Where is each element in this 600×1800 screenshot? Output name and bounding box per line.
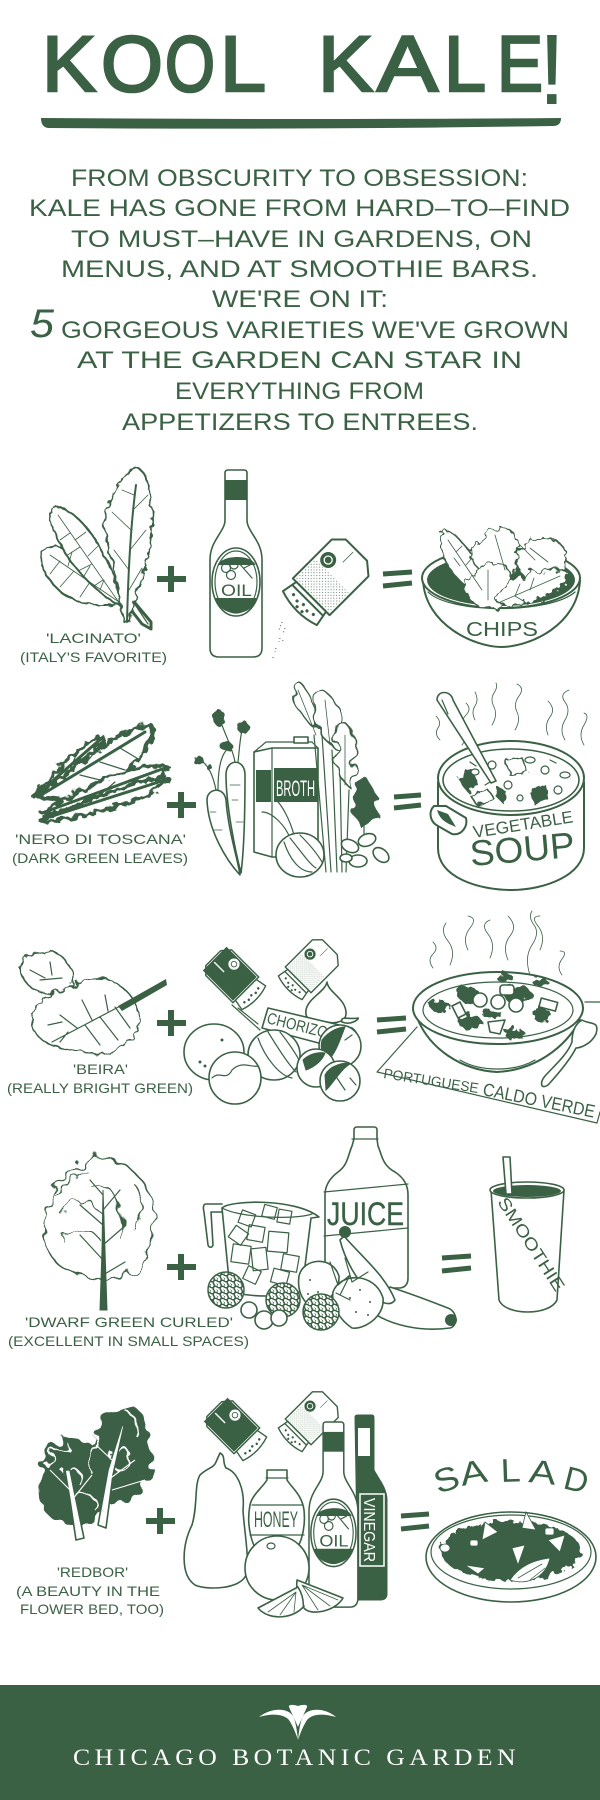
icon: steam [436,683,587,745]
title: L [220,19,266,108]
icon: salad plate [426,1512,596,1602]
plus sign [167,792,196,818]
intro text: GORGEOUS VARIETIES WE'VE GROWN [61,317,569,344]
text: salad heading: L [500,1451,521,1489]
text: redbor label [16,1564,164,1617]
icon: soup pot [431,692,584,890]
text: dwarf green curled label: (EXCELLENT IN SMALL SPACES) [8,1333,249,1349]
icon: smoothie cup: SMOOTHIE [494,1194,568,1295]
icon: placemat with label: PORTUGUESE [383,1065,480,1096]
icon: pepper shaker [201,945,269,1013]
icon: celery [292,682,357,872]
equals sign [383,572,412,586]
panel: beira caldo verde [7,911,600,1123]
panel: nero di toscana soup [12,682,587,890]
icon: salt shaker [273,532,376,660]
icon: dwarf green curled kale [44,1158,153,1310]
icon: juice bottle: JUICE [327,1196,404,1232]
icon: steam [430,911,565,975]
icon: pitcher of ice [203,1202,319,1296]
icon: chorizo: CHORIZO [265,1010,329,1042]
icon: vinegar bottle [355,1415,387,1600]
panel: dwarf green curled smoothie [8,1127,568,1349]
text: nero di toscana label: 'NERO DI TOSCANA' [15,831,186,847]
text: dwarf green curled label: 'DWARF GREEN CURLED' [25,1314,233,1330]
icon: oil bottle [210,470,262,657]
intro text: FROM OBSCURITY TO OBSESSION: [71,165,528,192]
title: O [165,19,215,108]
icon: broth carton: BROTH [276,776,315,801]
icon: soup pot: SOUP [468,824,576,874]
intro text: EVERYTHING FROM [175,378,424,405]
icon: herbs and beans [339,778,392,867]
text: lacinato label: 'LACINATO' [46,630,141,646]
icon: smoothie cup [490,1157,568,1312]
icon: salt shaker [275,935,343,1003]
text: beira label [7,1061,193,1096]
icon: honey jar: HONEY [254,1507,298,1532]
title: K [318,19,373,108]
text: nero di toscana label [12,831,188,866]
text: lacinato label [20,630,167,665]
title: K [42,19,96,108]
text: lacinato label: (ITALY'S FAVORITE) [20,649,167,665]
intro text: MENUS, AND AT SMOOTHIE BARS. [61,256,538,283]
panel: lacinato chips [20,468,580,665]
text: salad heading: S [429,1458,464,1501]
icon: beira leaf [20,952,167,1054]
panel: redbor salad [16,1387,596,1617]
title: A [377,19,438,108]
plus sign [167,1254,196,1280]
icon: salt shaker [275,1387,343,1455]
icon: lime wedges [258,1580,343,1617]
plus sign [146,1508,175,1534]
intro text [29,165,570,436]
text: redbor label: FLOWER BED, TOO) [20,1601,164,1617]
icon: honey jar [249,1470,304,1555]
icon: oil bottle [309,1422,358,1607]
title [42,14,566,126]
text: salad heading: A [457,1452,490,1493]
text: salad heading: A [527,1452,558,1492]
text: redbor label: 'REDBOR' [57,1564,128,1580]
text: dwarf green curled label [8,1314,249,1349]
icon: garden logo [259,1705,336,1740]
plus sign [157,566,186,592]
icon: broth carton [254,737,318,857]
icon: chorizo slices [297,1025,361,1101]
icon: butternut squash [184,1453,247,1588]
icon: caldo verde bowl [413,972,597,1087]
footer band [0,1685,600,1800]
title underline [41,118,561,129]
icon: soup pot: VEGETABLE [472,807,574,842]
icon: lacinato kale leaves [41,468,152,629]
plus sign [157,1010,186,1036]
icon: vinegar bottle: VINEGAR [360,1498,377,1562]
text: salad heading: D [560,1459,593,1501]
icon: bowl of kale chips [422,529,580,647]
intro text: WE'RE ON IT: [212,286,388,313]
icon: potatoes [184,1024,261,1104]
equals sign [377,1018,406,1032]
icon: bowl of kale chips: CHIPS [466,619,538,641]
title: ! [538,14,566,126]
title: E [497,19,543,108]
icon: juice bottle [324,1127,408,1288]
text: beira label: 'BEIRA' [73,1061,128,1077]
icon: carrots [193,710,248,875]
intro text: TO MUST–HAVE IN GARDENS, ON [71,226,532,253]
icon: chorizo [262,1008,358,1050]
intro text: AT THE GARDEN CAN STAR IN [77,347,522,374]
icon: nero di toscana leaves [34,725,168,822]
title: O [101,19,163,108]
equals sign [442,1256,471,1271]
intro text: 5 [30,302,55,346]
footer wordmark: CHICAGO BOTANIC GARDEN [73,1745,520,1770]
icon: garlic [306,982,358,1023]
intro text: APPETIZERS TO ENTREES. [122,409,478,436]
equals sign [401,1514,429,1529]
equals sign [394,795,421,808]
icon: onion [232,1005,300,1080]
text: nero di toscana label: (DARK GREEN LEAVES) [12,850,188,866]
text: beira label: (REALLY BRIGHT GREEN) [7,1080,193,1096]
intro text: KALE HAS GONE FROM HARD–TO–FIND [29,195,570,222]
icon: orange [245,1536,309,1600]
icon: onion [262,800,324,877]
icon: berries and fruit [208,1226,457,1330]
text: salad heading [429,1451,593,1501]
icon: pepper shaker [202,1396,270,1464]
icon: placemat with label [377,1002,600,1123]
title: L [444,19,486,108]
text: redbor label: (A BEAUTY IN THE [16,1583,160,1599]
icon: redbor kale [39,1408,154,1540]
